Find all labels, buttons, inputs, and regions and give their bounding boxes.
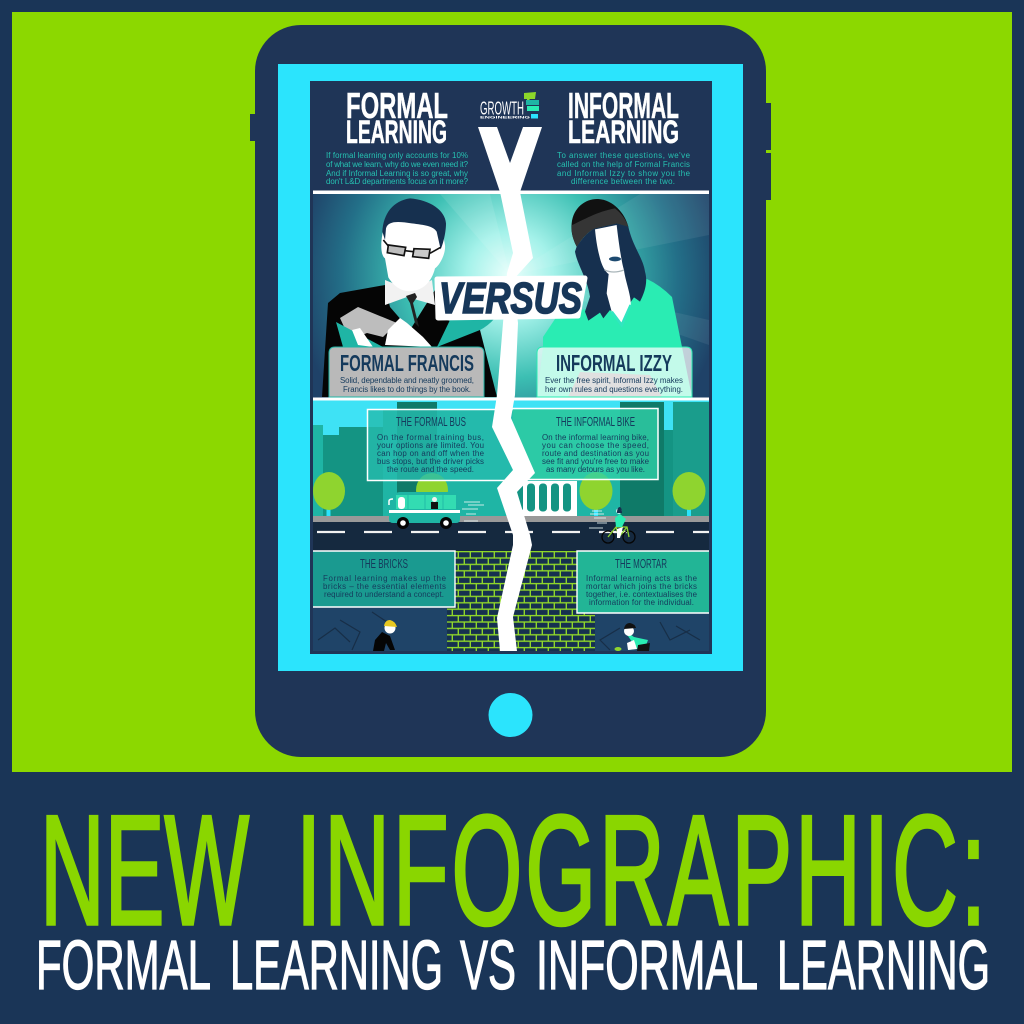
name card: informal izzy — [537, 347, 692, 397]
divider — [313, 190, 709, 194]
header left: formal learning: If formal learning only accounts for 10% — [326, 151, 468, 160]
info box: the mortar: Informal learning acts as the — [586, 574, 698, 583]
header left: formal learning: LEARNING — [346, 114, 447, 150]
header left: formal learning — [326, 85, 469, 186]
logo: growth engineering: GROWTH — [480, 98, 524, 118]
colonnade building — [517, 481, 577, 516]
divider — [313, 398, 709, 400]
bottom section background — [313, 551, 709, 651]
logo: growth engineering — [480, 92, 539, 120]
info box: the formal bus and the informal bike: On the formal training bus, — [377, 433, 484, 442]
versus badge: VERSUS — [439, 274, 582, 323]
subtitle: INFORMAL — [536, 926, 758, 1004]
info box: the bricks — [313, 551, 455, 607]
name card: formal francis: Francis likes to do things by the book. — [343, 385, 471, 394]
character: informal izzy — [537, 199, 692, 397]
subtitle: FORMAL — [36, 926, 211, 1004]
green backdrop panel — [12, 12, 1012, 772]
header right: informal learning: INFORMAL — [568, 85, 679, 126]
crack down the centre — [478, 127, 542, 651]
header left: formal learning: And if Informal Learning is so great, why — [326, 169, 468, 178]
name card: informal izzy: her own rules and questions everything. — [545, 385, 683, 394]
header left: formal learning: of what we learn, why do we even need it? — [326, 160, 469, 169]
header right: informal learning: and Informal Izzy to show you the — [557, 169, 691, 178]
header right: informal learning: called on the help of Formal Francis — [557, 160, 690, 169]
info box: the formal bus and the informal bike: can hop on and off when the — [377, 449, 485, 458]
info box: the bricks: THE BRICKS — [360, 557, 408, 571]
info box: the mortar: mortar which joins the bricks — [586, 582, 697, 591]
info box: the formal bus and the informal bike: as many detours as you like. — [546, 465, 645, 474]
info box: the formal bus and the informal bike: route and destination as you — [542, 449, 649, 458]
name card: informal izzy: INFORMAL IZZY — [556, 350, 672, 376]
info box: the formal bus and the informal bike: THE FORMAL BUS — [396, 415, 466, 429]
road — [313, 516, 709, 551]
info box: the mortar: THE MORTAR — [615, 557, 667, 571]
subtitle — [36, 926, 990, 1004]
info box: the formal bus and the informal bike: the route and the speed. — [387, 465, 474, 474]
header right: informal learning: LEARNING — [568, 114, 679, 150]
bus — [389, 492, 484, 529]
worker: francis with hard hat — [373, 620, 397, 651]
main title: NEW — [40, 784, 249, 958]
info box: the bricks: Formal learning makes up the — [323, 574, 447, 583]
info box: the formal bus and the informal bike: you can choose the speed, — [542, 441, 649, 450]
character: formal francis — [322, 198, 497, 397]
info box: the bricks: required to understand a concept. — [324, 590, 444, 599]
logo: growth engineering: ENGINEERING — [480, 116, 530, 120]
info box: the mortar: information for the individual. — [589, 598, 694, 607]
header left: formal learning: don't L&D departments focus on it more? — [326, 177, 469, 186]
name card: formal francis — [329, 347, 484, 397]
info box: the formal bus and the informal bike: bus stops, but the driver picks — [377, 457, 484, 466]
info box: the formal bus and the informal bike: THE INFORMAL BIKE — [556, 415, 635, 429]
city background — [313, 400, 709, 518]
info box: the formal bus and the informal bike: your options are limited. You — [377, 441, 484, 450]
info box: the bricks: bricks – the essential elements — [323, 582, 446, 591]
infographic frame — [310, 81, 712, 654]
worker: izzy with mortar — [614, 623, 650, 651]
brick wall — [447, 551, 595, 651]
trees — [313, 472, 706, 518]
info box: the formal bus and the informal bike: On the informal learning bike, — [542, 433, 649, 442]
subtitle: LEARNING — [230, 926, 443, 1004]
name card: formal francis: FORMAL FRANCIS — [340, 350, 474, 376]
info box: the formal bus and the informal bike — [368, 408, 658, 480]
wall cracks — [318, 612, 700, 650]
info box: the mortar — [577, 551, 709, 613]
tablet device — [250, 25, 771, 757]
subtitle: VS — [460, 926, 516, 1004]
info box: the mortar: together, i.e. contextualises the — [586, 590, 698, 599]
header left: formal learning: FORMAL — [346, 85, 448, 126]
header right: informal learning: To answer these questions, we've — [557, 151, 691, 160]
info box: the formal bus and the informal bike: see fit and you're free to make — [542, 457, 650, 466]
header right: informal learning: difference between the two. — [571, 177, 675, 186]
cyclist — [589, 507, 635, 543]
hero panel background — [313, 194, 709, 398]
name card: informal izzy: Ever the free spirit, Informal Izzy makes — [545, 376, 683, 385]
header right: informal learning — [557, 85, 691, 186]
name card: formal francis: Solid, dependable and neatly groomed, — [340, 376, 474, 385]
